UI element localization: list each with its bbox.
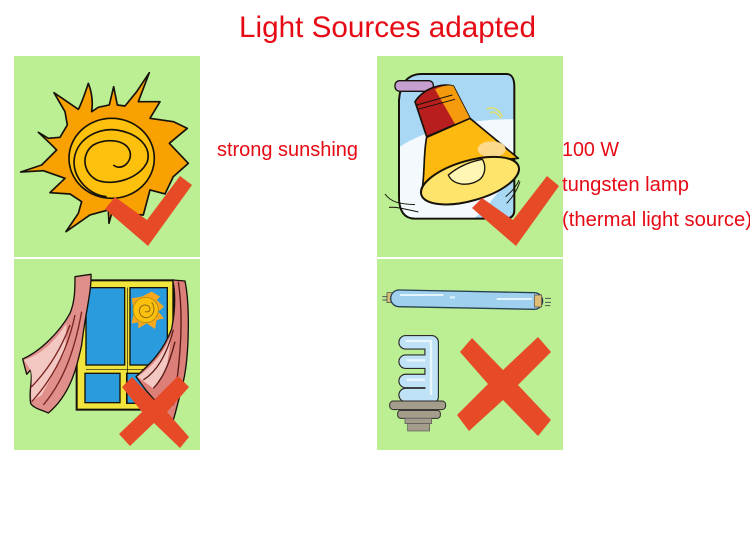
right curtain [136, 280, 188, 420]
label: lamp description: 100 W [562, 139, 619, 161]
icon: small sun [132, 292, 164, 329]
panel: strong sunshine [14, 56, 200, 257]
icon: check mark [105, 176, 192, 246]
panel: window with sunlight [14, 259, 200, 450]
icon: fluorescent tube [382, 293, 551, 431]
icon: window [23, 274, 188, 420]
icon: check mark [472, 176, 559, 246]
icon: cross mark [457, 337, 551, 436]
title: Light Sources adapted [239, 11, 536, 44]
panel: fluorescent lamps [377, 259, 563, 450]
icon: spiral bulb [390, 341, 446, 431]
panel: tungsten lamp [377, 56, 563, 257]
label: lamp description: (thermal light source) [562, 209, 750, 231]
icon: sun [21, 73, 188, 232]
icon: cross mark [119, 376, 189, 448]
left curtain [23, 274, 91, 413]
label: lamp description [562, 139, 750, 231]
icon: desk lamp [385, 74, 524, 219]
label: strong sunshing: strong sunshing [217, 139, 358, 161]
label: lamp description: tungsten lamp [562, 174, 689, 196]
